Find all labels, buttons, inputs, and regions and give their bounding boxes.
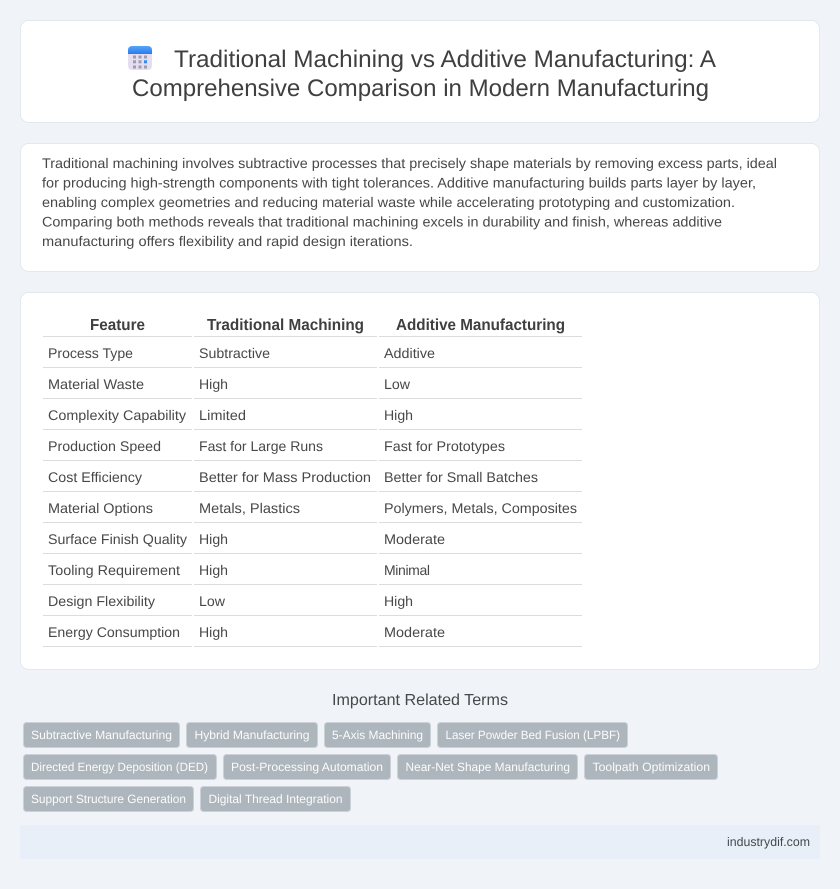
title: Traditional Machining vs Additive Manufacturing: A: [174, 46, 716, 73]
table row: Design Flexibility: Design Flexibility: [48, 593, 155, 609]
table row: Process Type: Additive: [384, 345, 435, 361]
table row: Tooling Requirement: [43, 562, 582, 585]
text block: description: [42, 155, 777, 249]
table row: Design Flexibility: High: [384, 593, 413, 609]
table row: Surface Finish Quality: [43, 531, 582, 554]
table row: Material Waste: Material Waste: [48, 376, 144, 392]
table row: Production Speed: Fast for Large Runs: [199, 438, 323, 454]
footer source text: industrydif.com: [727, 835, 810, 849]
tag: Toolpath Optimization: [584, 754, 718, 780]
tag: 5-Axis Machining: [324, 722, 430, 748]
table header: Feature: [90, 317, 145, 334]
tag: Near-Net Shape Manufacturing: Near-Net Shape Manufacturing: [406, 760, 570, 774]
table row: Tooling Requirement: Minimal: [384, 562, 430, 578]
table row: Material Waste: Low: [384, 376, 411, 392]
table row: Cost Efficiency: [43, 469, 582, 492]
table row: Cost Efficiency: Better for Small Batches: [384, 469, 538, 485]
tag: Hybrid Manufacturing: Hybrid Manufacturing: [194, 728, 310, 742]
table header: Additive Manufacturing: [396, 317, 565, 334]
tag: 5-Axis Machining: 5-Axis Machining: [332, 728, 423, 742]
table header: Traditional Machining: [207, 317, 364, 334]
table row: Material Waste: [43, 376, 582, 399]
table row: Design Flexibility: Low: [199, 593, 226, 609]
tag: Post-Processing Automation: [224, 754, 390, 780]
tag: Digital Thread Integration: Digital Thread Integration: [208, 792, 342, 806]
heading: related terms: Important Related Terms: [332, 692, 508, 709]
table row: Complexity Capability: High: [384, 407, 413, 423]
tag: Subtractive Manufacturing: [24, 722, 180, 748]
table row: Energy Consumption: High: [199, 624, 228, 640]
table row: Energy Consumption: Energy Consumption: [48, 624, 180, 640]
text block: description: manufacturing offers flexibility and rapid design iterations.: [42, 233, 413, 249]
table row: Process Type: [43, 345, 582, 368]
tag: Directed Energy Deposition (DED): [24, 754, 216, 780]
panel: title header: [20, 20, 820, 122]
table row: Surface Finish Quality: Surface Finish Quality: [48, 531, 187, 547]
table row: Material Options: Material Options: [48, 500, 153, 516]
table row: Material Options: Metals, Plastics: [199, 500, 300, 516]
tag: Laser Powder Bed Fusion (LPBF): [438, 722, 628, 748]
tag group: related terms: [24, 722, 718, 812]
tag: Digital Thread Integration: [200, 786, 350, 812]
table row: Tooling Requirement: Tooling Requirement: [48, 562, 180, 578]
table row: Process Type: Process Type: [48, 345, 133, 361]
title: [132, 46, 716, 102]
table row: Material Waste: High: [199, 376, 228, 392]
text block: description: Comparing both methods reveals that traditional machining excels in durability and finish, whereas additive: [42, 214, 722, 230]
table row: Energy Consumption: Moderate: [384, 624, 445, 640]
table row: Energy Consumption: [43, 624, 582, 647]
table row: Material Options: [43, 500, 582, 523]
tag: Support Structure Generation: Support Structure Generation: [31, 792, 186, 806]
table row: Complexity Capability: Limited: [199, 407, 246, 423]
table row: Production Speed: Production Speed: [48, 438, 161, 454]
footer bar: [20, 825, 820, 859]
panel: comparison table: [20, 292, 820, 670]
table row: Process Type: Subtractive: [199, 345, 270, 361]
table row: Complexity Capability: [43, 407, 582, 430]
text block: description: for producing high-strength components with tight tolerances. Additive manufacturing builds parts layer by layer,: [42, 174, 756, 190]
tag: Near-Net Shape Manufacturing: [398, 754, 578, 780]
table row: Production Speed: Fast for Prototypes: [384, 438, 505, 454]
tag: Subtractive Manufacturing: Subtractive Manufacturing: [31, 728, 172, 742]
table row: Tooling Requirement: High: [199, 562, 228, 578]
table row: Surface Finish Quality: High: [199, 531, 228, 547]
table row: Surface Finish Quality: Moderate: [384, 531, 445, 547]
title: Comprehensive Comparison in Modern Manufacturing: [132, 75, 709, 102]
text block: description: enabling complex geometries and reducing material waste while accelerating prototyping and customization.: [42, 194, 735, 210]
table row: Cost Efficiency: Cost Efficiency: [48, 469, 142, 485]
tag: Hybrid Manufacturing: [186, 722, 318, 748]
icon: calendar: [128, 46, 152, 70]
table row: Design Flexibility: [43, 593, 582, 616]
tag: Toolpath Optimization: Toolpath Optimization: [592, 760, 710, 774]
tag: Directed Energy Deposition (DED): Directed Energy Deposition (DED): [31, 760, 208, 774]
table row: Production Speed: [43, 438, 582, 461]
tag: Support Structure Generation: [24, 786, 194, 812]
panel: intro text: [20, 144, 820, 272]
table row: Complexity Capability: Complexity Capability: [48, 407, 186, 423]
tag: Laser Powder Bed Fusion (LPBF): Laser Powder Bed Fusion (LPBF): [446, 728, 620, 742]
table row: Cost Efficiency: Better for Mass Production: [199, 469, 371, 485]
text block: description: Traditional machining involves subtractive processes that precisely shape materials by removing excess parts, ideal: [42, 155, 777, 171]
tag: Post-Processing Automation: Post-Processing Automation: [231, 760, 383, 774]
table header: [43, 317, 582, 337]
table row: Material Options: Polymers, Metals, Composites: [384, 500, 577, 516]
